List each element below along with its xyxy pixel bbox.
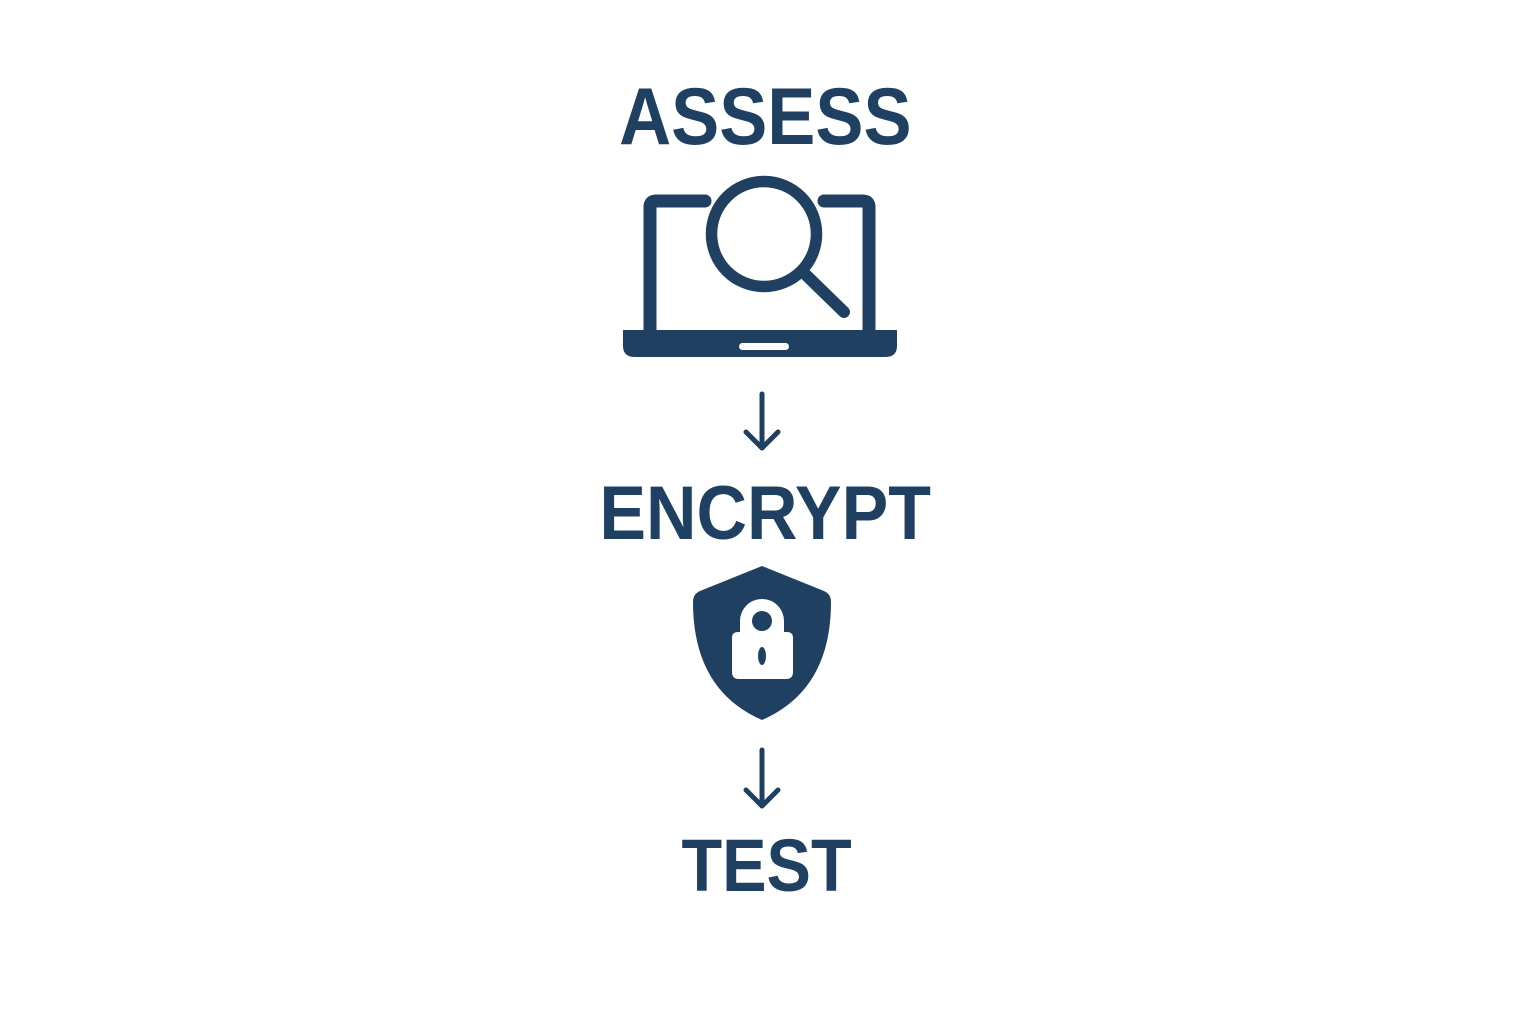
title: encrypt: ENCRYPT xyxy=(599,471,931,556)
arrow 1 xyxy=(744,392,780,450)
arrow 2 xyxy=(744,748,780,808)
title: test: TEST xyxy=(682,824,852,907)
title: assess: ASSESS xyxy=(619,72,911,162)
